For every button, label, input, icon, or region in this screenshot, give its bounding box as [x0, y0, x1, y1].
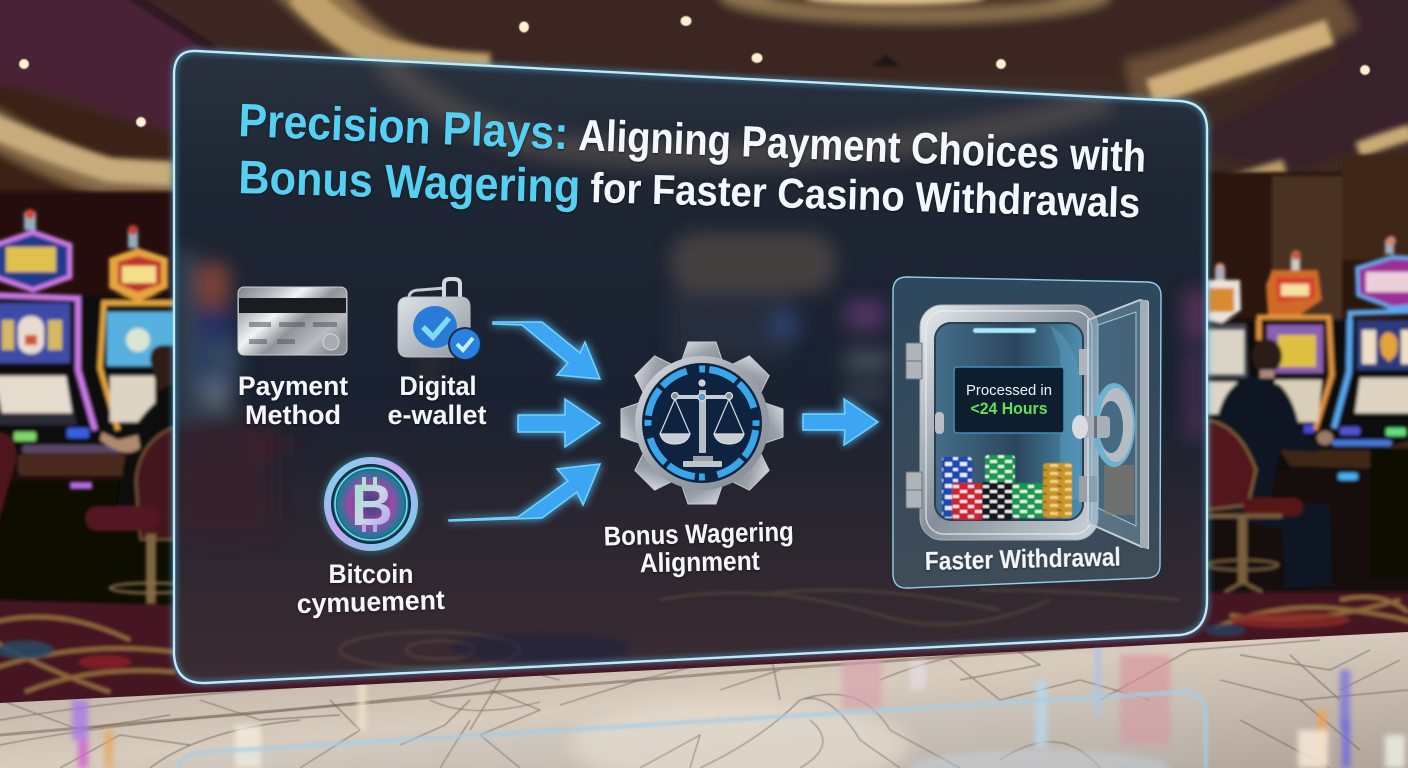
title: Bonus Wagering [238, 150, 581, 213]
label: payment method: Payment [238, 371, 348, 401]
floor marble veins [0, 640, 1408, 768]
floor reflections [72, 640, 1405, 768]
label: payment method [238, 371, 348, 430]
casino chips [942, 455, 1072, 520]
screen: processed in: <24 Hours [970, 400, 1048, 418]
label: bonus wagering alignment: Bonus Wagering [603, 517, 794, 551]
ceiling [0, 0, 1408, 195]
icon: payment card [238, 287, 347, 355]
label: faster withdrawal: Faster Withdrawal [924, 542, 1121, 576]
icon: gear with scales [621, 342, 783, 504]
label: bonus wagering alignment [603, 517, 794, 578]
label: bitcoin [296, 559, 445, 619]
icon: digital wallet [398, 279, 482, 361]
scales of justice [660, 380, 744, 467]
arrow: wallet to alignment [493, 322, 600, 379]
label: digital e-wallet [388, 371, 486, 430]
screen: processed in: Processed in [966, 382, 1052, 399]
marble floor [0, 625, 1408, 768]
seated player left [150, 345, 175, 392]
icon: bitcoin coin: B [351, 473, 393, 538]
title: Aligning Payment Choices with [578, 111, 1147, 182]
panel blurred backdrop [174, 55, 1207, 668]
panel: faster withdrawal card [893, 277, 1161, 588]
door [1088, 300, 1148, 548]
back wall [0, 155, 1408, 605]
carpet [0, 585, 1408, 715]
label: digital e-wallet: Digital [400, 371, 476, 401]
screen: processed in [954, 367, 1064, 433]
downlights [19, 16, 1370, 127]
arrow: alignment to withdrawal [803, 399, 878, 445]
title: for Faster Casino Withdrawals [590, 164, 1141, 226]
seated player right [1216, 375, 1332, 588]
label: bitcoin: cymuement [296, 585, 445, 619]
icon: vault [906, 300, 1148, 548]
label: bonus wagering alignment: Alignment [640, 546, 760, 578]
arrow: bitcoin to alignment [449, 464, 600, 521]
label: digital e-wallet: e-wallet [388, 400, 486, 430]
slot machines left [0, 209, 194, 604]
slot machines right [1207, 236, 1408, 592]
title [238, 93, 1147, 226]
title: Precision Plays: [238, 93, 569, 159]
icon: bitcoin coin [321, 454, 421, 554]
glass panel [174, 51, 1207, 683]
label: payment method: Method [245, 400, 341, 430]
panel reflection on floor [178, 692, 1206, 768]
arrow: card to alignment [518, 399, 600, 447]
label: bitcoin: Bitcoin [328, 559, 414, 589]
